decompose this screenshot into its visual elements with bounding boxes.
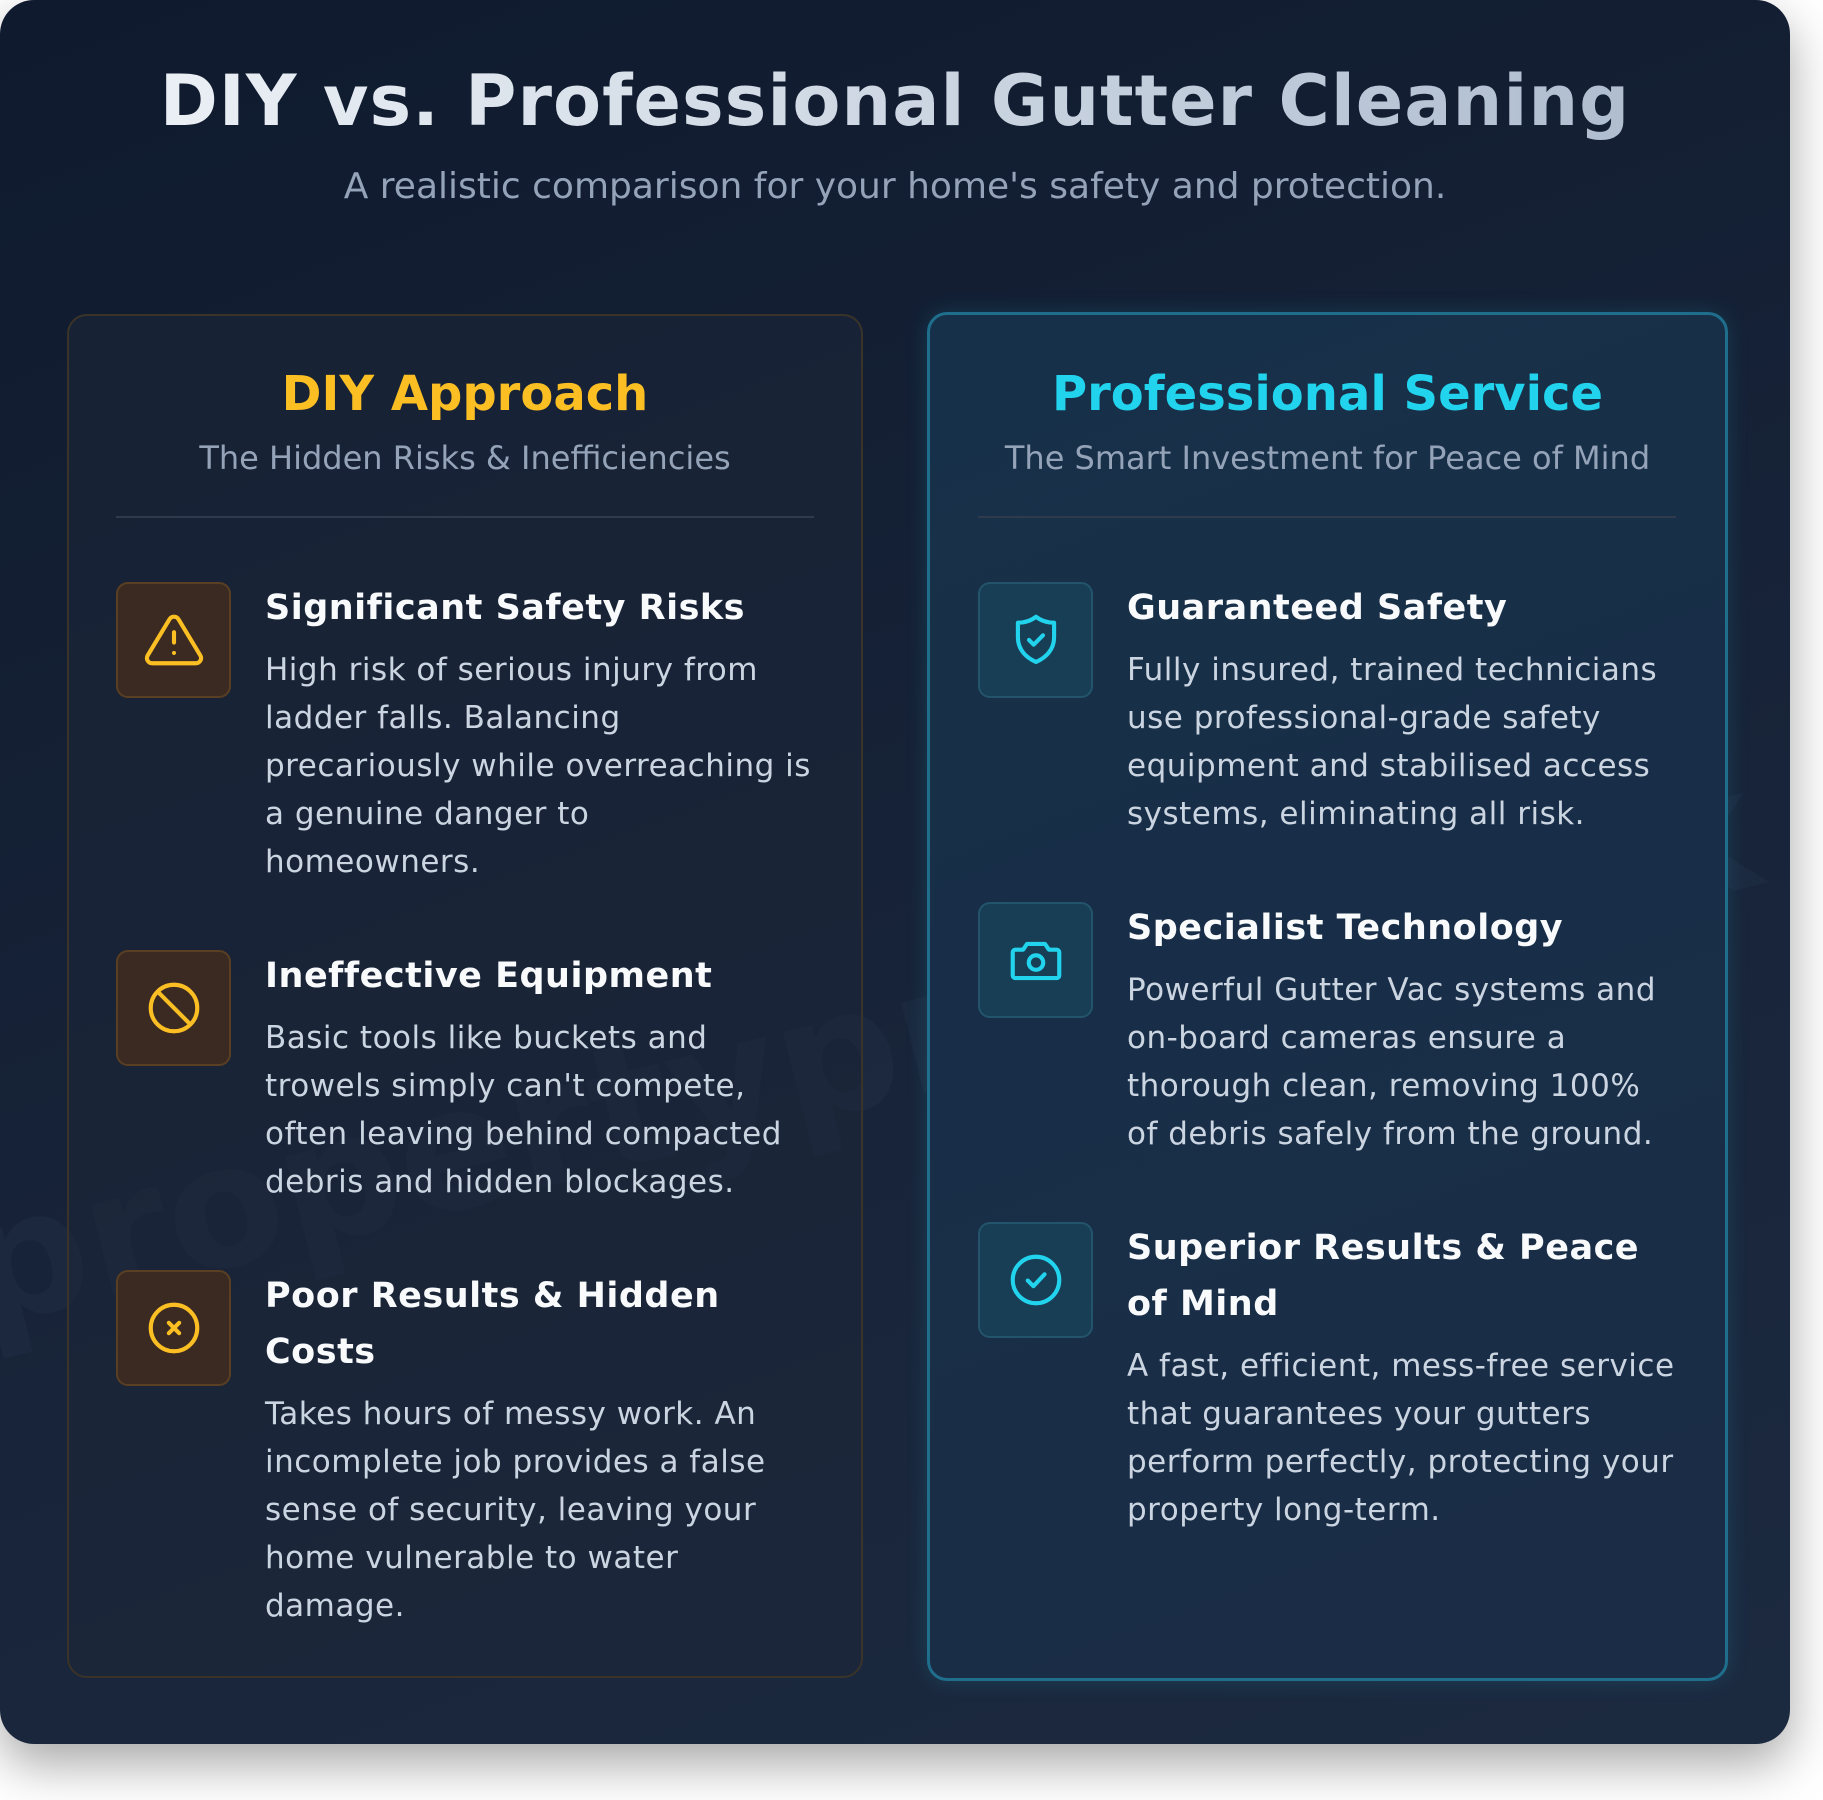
panel: professional bbox=[927, 312, 1728, 1681]
item: Specialist Technology bbox=[978, 902, 1656, 1152]
heading: DIY Approach: DIY Approach bbox=[282, 366, 648, 422]
text: Powerful Gutter Vac systems and on-board cameras ensure a thorough clean, removing 100% bbox=[1127, 972, 1656, 1104]
text: A fast, efficient, mess-free service bbox=[1127, 1348, 1675, 1384]
text: property long-term. bbox=[1127, 1492, 1441, 1528]
subtitle: A realistic comparison for your home's safety and protection. bbox=[344, 166, 1446, 207]
text: High risk of serious injury from ladder falls. Balancing precariously while overreaching is a genuine danger to bbox=[265, 652, 811, 832]
text: that guarantees your gutters bbox=[1127, 1396, 1591, 1432]
text: Poor Results & Hidden Costs bbox=[265, 1276, 720, 1372]
item: Poor Results & Hidden Costs bbox=[116, 1270, 766, 1624]
text: Takes hours of messy work. An incomplete job provides a false sense of security, leaving your home vulnerable to water damage. bbox=[265, 1396, 766, 1624]
text: Fully insured, trained technicians use professional-grade safety equipment and stabilised access systems, eliminating all risk. bbox=[1127, 652, 1657, 832]
icon: prohibited bbox=[116, 950, 231, 1066]
subheading: DIY: The Hidden Risks & Inefficiencies bbox=[199, 439, 731, 477]
item: Significant Safety Risks bbox=[116, 582, 811, 880]
item: Superior Results & Peace of Mind bbox=[978, 1222, 1675, 1528]
panel: DIY bbox=[67, 314, 863, 1678]
text: Significant Safety Risks bbox=[265, 588, 745, 628]
item: Ineffective Equipment bbox=[116, 950, 782, 1200]
icon: x circle bbox=[116, 1270, 231, 1386]
icon: shield check bbox=[978, 582, 1093, 698]
title: DIY vs. Professional Gutter Cleaning bbox=[160, 60, 1630, 142]
item: Guaranteed Safety bbox=[978, 582, 1657, 832]
text: homeowners. bbox=[265, 844, 480, 880]
icon: warning bbox=[116, 582, 231, 698]
heading: Professional Service: Professional Service bbox=[1052, 366, 1603, 422]
icon: check circle bbox=[978, 1222, 1093, 1338]
text: Basic tools like buckets and trowels simply can't compete, often leaving behind compacted debris and hidden blockages. bbox=[265, 1020, 782, 1200]
text: of debris safely from the ground. bbox=[1127, 1116, 1653, 1152]
icon: camera bbox=[978, 902, 1093, 1018]
text: perform perfectly, protecting your bbox=[1127, 1444, 1674, 1480]
subheading: professional: The Smart Investment for Peace of Mind bbox=[1005, 439, 1650, 477]
text: Specialist Technology bbox=[1127, 908, 1563, 948]
text: Ineffective Equipment bbox=[265, 956, 712, 996]
text: Superior Results & Peace of Mind bbox=[1127, 1228, 1639, 1324]
text: Guaranteed Safety bbox=[1127, 588, 1507, 628]
